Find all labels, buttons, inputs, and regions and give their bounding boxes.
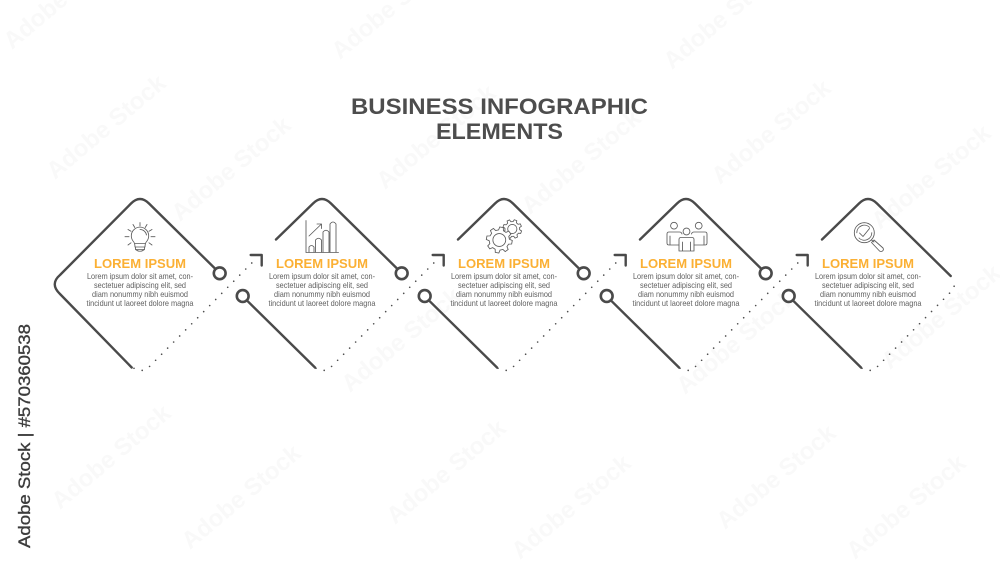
text block — [86, 272, 194, 308]
heading: LOREM IPSUM — [276, 256, 368, 271]
text block — [632, 272, 740, 308]
icon: magnifier — [854, 223, 883, 252]
background watermark: Adobe Stock — [507, 449, 637, 563]
text block: Lorem ipsum dolor sit amet, con- — [633, 272, 739, 281]
text block: diam nonummy nibh euismod — [274, 290, 370, 299]
text block: tincidunt ut laoreet dolore magna — [450, 299, 558, 308]
background watermark: Adobe Stock — [707, 74, 837, 190]
text block: Lorem ipsum dolor sit amet, con- — [87, 272, 193, 281]
icon: gears — [484, 217, 524, 255]
text block: tincidunt ut laoreet dolore magna — [268, 299, 376, 308]
text block: tincidunt ut laoreet dolore magna — [86, 299, 194, 308]
background watermark: Adobe Stock — [867, 119, 997, 235]
title — [351, 94, 648, 144]
text block: diam nonummy nibh euismod — [92, 290, 188, 299]
title: BUSINESS INFOGRAPHIC — [351, 94, 648, 119]
background watermark: Adobe Stock — [177, 439, 307, 555]
background watermark: Adobe Stock — [672, 284, 802, 400]
heading: LOREM IPSUM — [640, 256, 732, 271]
background watermark: Adobe Stock — [712, 419, 842, 535]
background watermark: Adobe Stock — [372, 79, 502, 195]
text block: tincidunt ut laoreet dolore magna — [632, 299, 740, 308]
text block: Lorem ipsum dolor sit amet, con- — [815, 272, 921, 281]
background watermark: Adobe Stock — [337, 282, 467, 398]
text block: sectetuer adipiscing elit, sed — [458, 281, 550, 290]
heading: LOREM IPSUM — [822, 256, 914, 271]
heading: LOREM IPSUM — [94, 256, 186, 271]
title: ELEMENTS — [436, 119, 563, 144]
text block: Lorem ipsum dolor sit amet, con- — [451, 272, 557, 281]
icon: bar chart — [306, 220, 338, 252]
panel: step 4 — [601, 199, 808, 370]
icon: light bulb — [125, 222, 155, 251]
icon: team — [667, 222, 707, 251]
background watermark: Adobe Stock — [842, 449, 972, 563]
background watermark: Adobe Stock — [42, 69, 172, 185]
text block — [814, 272, 922, 308]
text block: sectetuer adipiscing elit, sed — [94, 281, 186, 290]
panel: step 2 — [237, 199, 444, 370]
text block: diam nonummy nibh euismod — [820, 290, 916, 299]
stock id vertical label: Adobe Stock | #570360538 — [15, 324, 34, 548]
text block: Lorem ipsum dolor sit amet, con- — [269, 272, 375, 281]
background watermark: Adobe Stock — [517, 104, 647, 220]
text block: diam nonummy nibh euismod — [456, 290, 552, 299]
text block: tincidunt ut laoreet dolore magna — [814, 299, 922, 308]
heading: LOREM IPSUM — [458, 256, 550, 271]
text block — [268, 272, 376, 308]
text block: sectetuer adipiscing elit, sed — [822, 281, 914, 290]
panel: step 1 — [55, 199, 262, 370]
text block: sectetuer adipiscing elit, sed — [640, 281, 732, 290]
panel: step 5 — [783, 199, 954, 370]
text block — [450, 272, 558, 308]
background watermark: Adobe Stock — [47, 399, 177, 515]
panel: step 3 — [419, 199, 626, 370]
background watermark: Adobe Stock — [167, 111, 297, 227]
background watermark: Adobe Stock — [382, 414, 512, 530]
text block: sectetuer adipiscing elit, sed — [276, 281, 368, 290]
text block: diam nonummy nibh euismod — [638, 290, 734, 299]
